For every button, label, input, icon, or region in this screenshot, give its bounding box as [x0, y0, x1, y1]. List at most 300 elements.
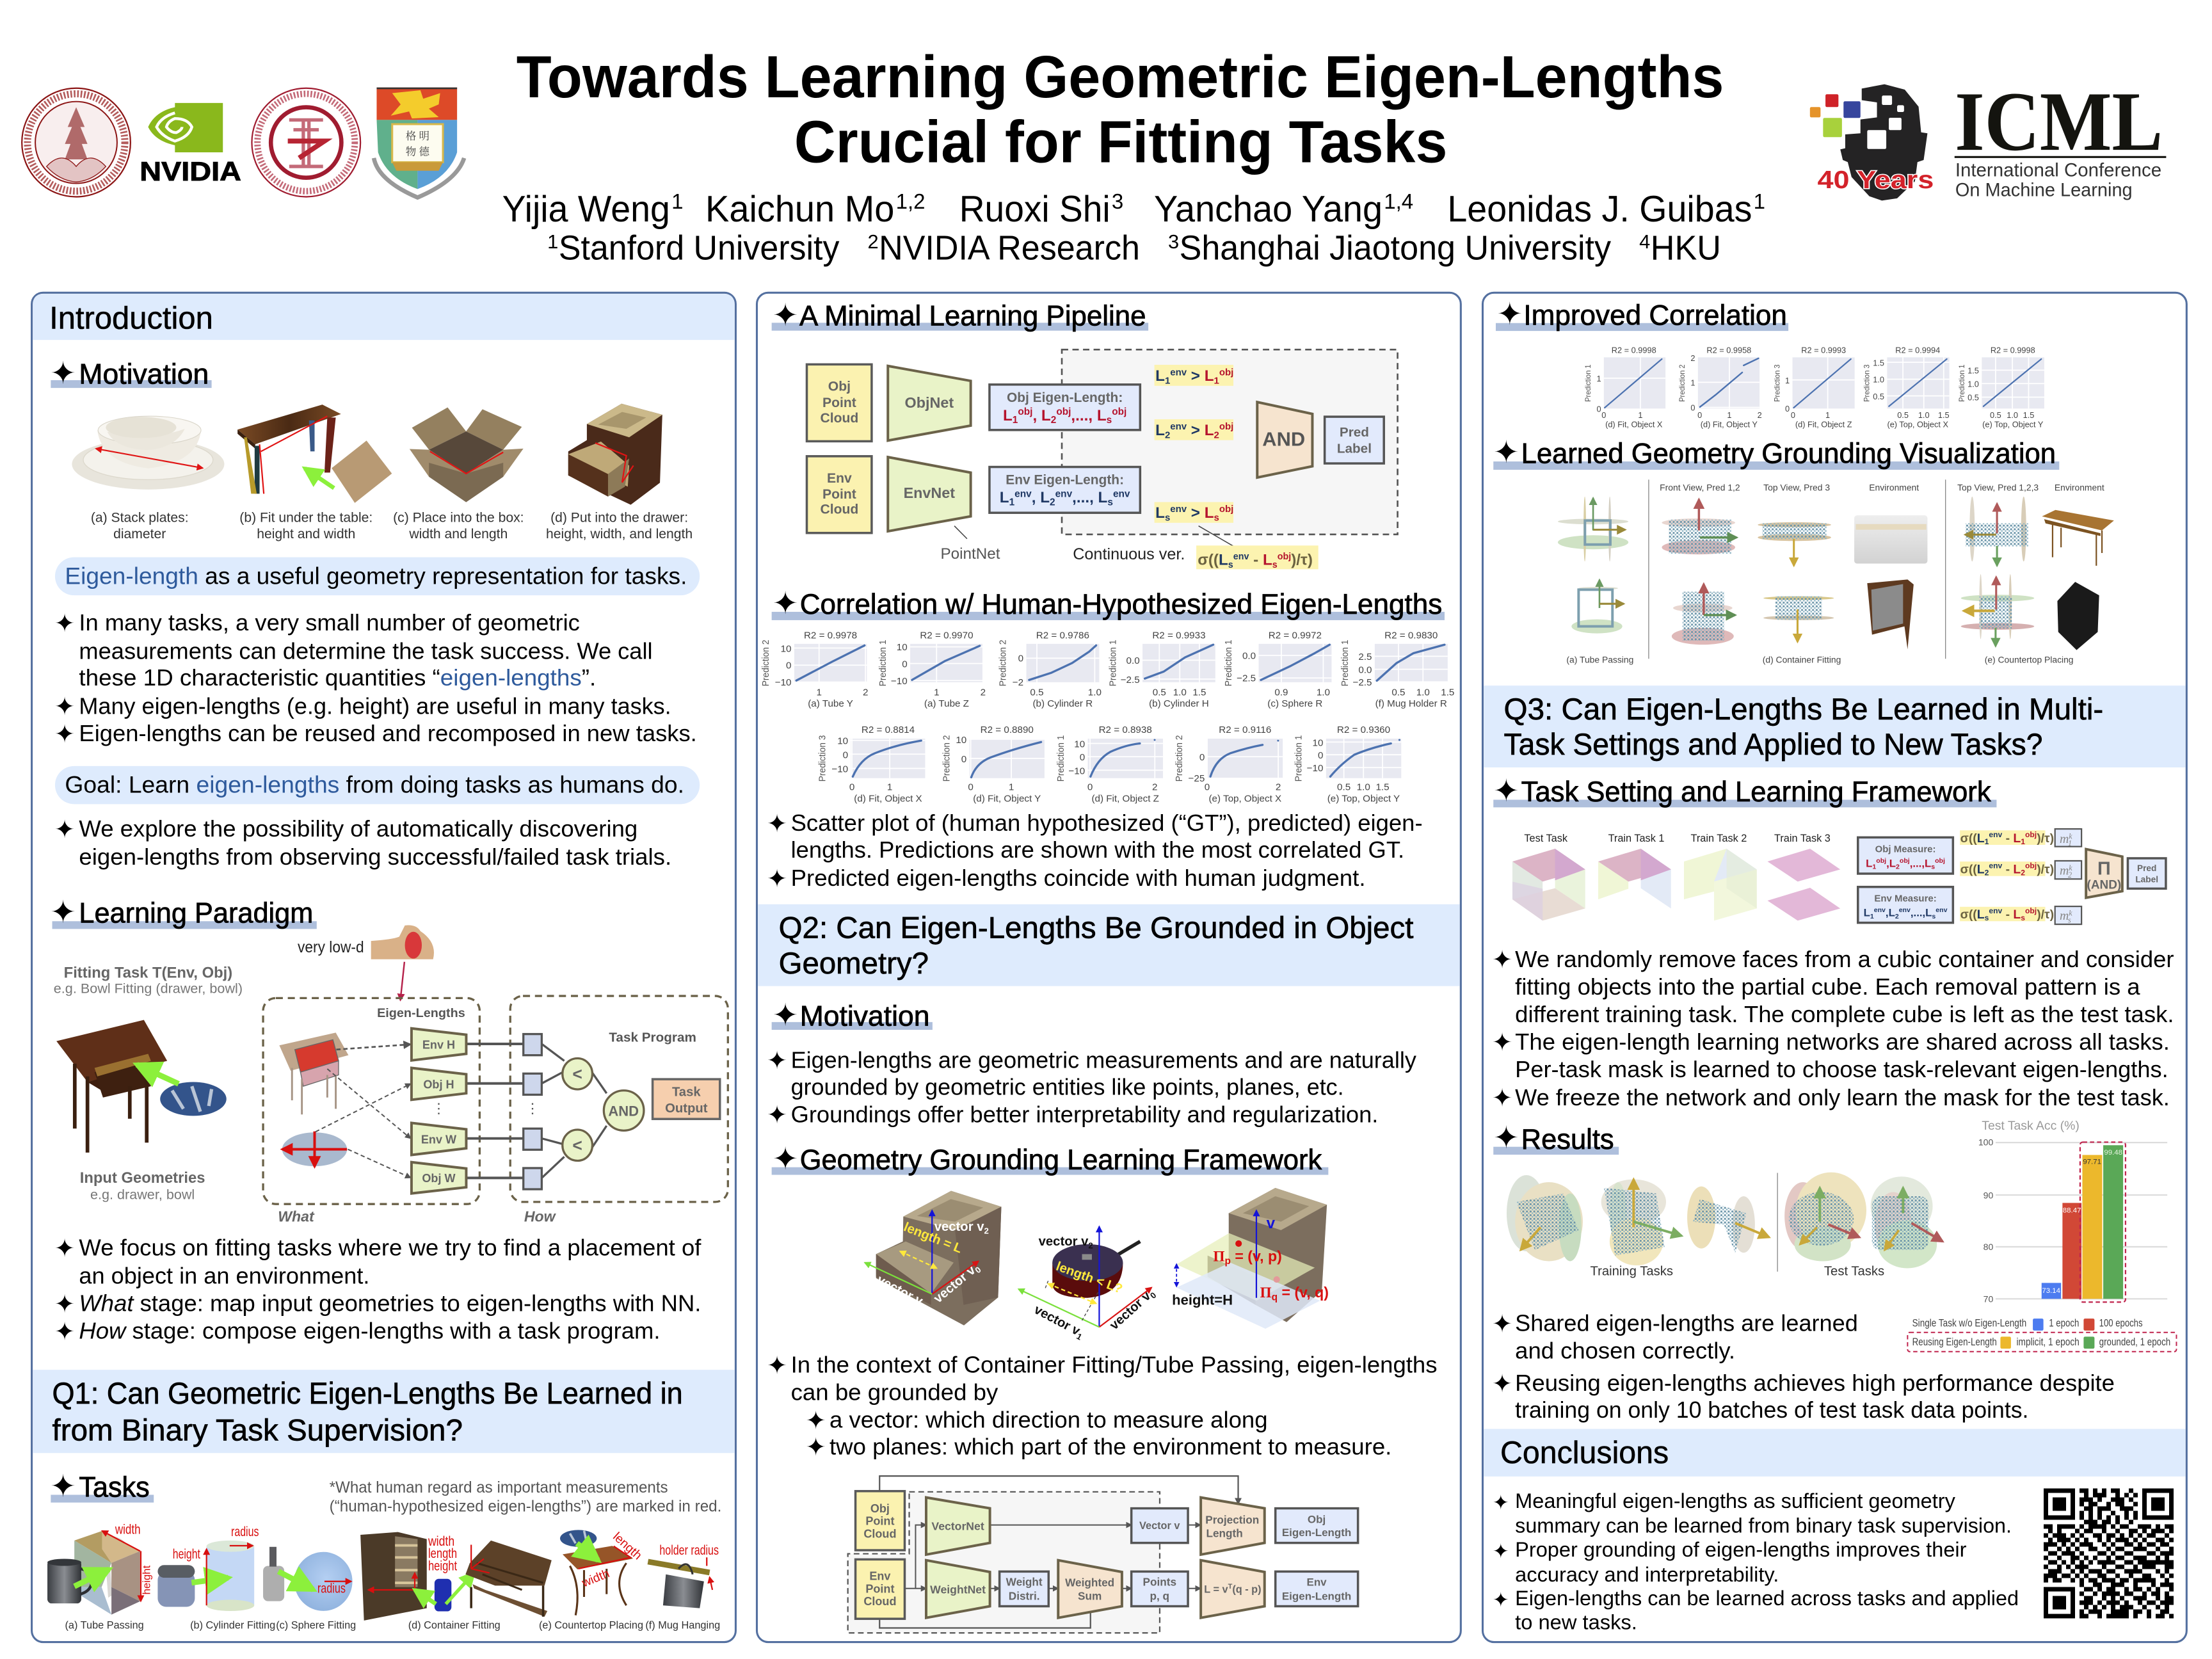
comparison: L2: L [1205, 422, 1214, 439]
box: env eigen-length: env [1014, 488, 1032, 499]
text: eigen-length bullets: measurements can determine the task success. We call [79, 637, 653, 664]
logo: HKU crest: 格 明 [406, 127, 429, 143]
image: drawer with planes: v [1267, 1215, 1276, 1232]
callout: goal: Goal: Learn eigen-lengths from doing tasks as humans do. [65, 771, 684, 798]
text: grounding bullets: can be grounded by [791, 1379, 998, 1406]
eigen-length encoder: Obj H: Obj H [423, 1078, 454, 1091]
diagram: learning paradigm: How [524, 1208, 557, 1225]
block: length formula: (q - p) [1232, 1583, 1262, 1595]
encoder: VectorNet: VectorNet [931, 1519, 984, 1532]
chart: Tube Z: 10 [897, 642, 908, 653]
chart: improved Fit Object X: R2 = 0.9998 [1612, 345, 1656, 355]
heading: Introduction: Introduction [49, 301, 213, 336]
encoder: ObjNet [888, 366, 971, 440]
subheading: Results [1493, 1120, 1619, 1156]
chart: improved Top Object Y: 0.5 [1990, 410, 2001, 420]
comparison: L2 [1155, 419, 1233, 440]
text: eigen-length bullets [54, 609, 697, 749]
chart: Mug Holder R: 1.0 [1416, 687, 1430, 698]
chart: Top Object Y: 1.0 [1357, 781, 1370, 792]
subheading: Results: Results [1521, 1124, 1614, 1155]
chart: improved Fit Object Y: 0 [1690, 403, 1695, 412]
box: vector v [1132, 1509, 1188, 1543]
box: pred label: Label [1337, 442, 1372, 456]
image: tube passing: height [141, 1565, 153, 1594]
visualization: tube passing [1558, 497, 1628, 634]
chart: improved Fit Object X: 1 [1638, 410, 1642, 420]
chart: Sphere R: 0.0 [1242, 650, 1256, 661]
visualization: countertop placing pred 1 2 3 [1961, 497, 2034, 646]
text: eigen-length bullets: ✦ [54, 693, 75, 721]
subheading: Motivation: ✦ [50, 356, 76, 392]
text: task setting bullets: Per-task mask is learned to choose task-relevant eigen-lengths. [1515, 1056, 2168, 1082]
comparison: Ls [1155, 502, 1233, 523]
box: env eigen-length: L [1000, 489, 1009, 506]
chart: Tube Y: (a) Tube Y [808, 698, 853, 709]
image: stack plates [72, 416, 224, 490]
chart: Top Object X: R2 = 0.9116 [1219, 725, 1271, 735]
box: obj eigen-length: Eigen-Length [1282, 1527, 1351, 1539]
caption: stack plates: diameter [113, 527, 166, 541]
formula: mask 1: 1 [1985, 837, 1989, 846]
comparison: L2: L [1155, 422, 1165, 439]
image: sphere fitting [263, 1547, 353, 1611]
caption: drawer: (d) Put into the drawer: [550, 511, 688, 525]
chart: improved Fit Object Z: (d) Fit, Object Z [1795, 419, 1852, 429]
chart: improved Top Object Y: 1.5 [2023, 410, 2034, 420]
formula: continuous version: env [1233, 552, 1249, 562]
logic: AND [1257, 402, 1312, 477]
image: drawer with planes [1172, 1188, 1329, 1329]
chart: Fit Object Y [942, 725, 1045, 805]
comparison: Ls: obj [1219, 504, 1233, 515]
diagram: learning paradigm: What [278, 1208, 315, 1225]
chart: improved Top Object X: 1.5 [1938, 410, 1950, 420]
comparison: L1: 1 [1165, 376, 1170, 387]
block: length formula [1201, 1560, 1265, 1618]
labels: training and test tasks: Test Tasks [1824, 1264, 1884, 1278]
formula: mask s: k [2069, 908, 2072, 917]
caption: box: width and length [408, 527, 508, 541]
caption: drawer [546, 511, 693, 541]
image: drawer with vectors: vector v [931, 1263, 978, 1306]
image: cooker with vectors: vector v [1032, 1302, 1082, 1338]
box: env point cloud: Cloud [863, 1595, 896, 1608]
logo: ICML 40 years [1810, 74, 2166, 201]
formula: mask 2: σ((L [1960, 862, 1985, 876]
authors: Ruoxi Shi [959, 189, 1110, 230]
legend: accuracy chart [1907, 1318, 2176, 1352]
caption: table [239, 511, 373, 541]
visualization: container fitting pred 1 2 [1662, 499, 1736, 645]
formula: mask s: obj [2025, 906, 2037, 915]
formula: mask s: s [2021, 913, 2025, 922]
labels: grounding views: (d) Container Fitting [1763, 654, 1841, 664]
image: drawer with planes: Π [1214, 1248, 1225, 1265]
eigen-length encoder: Obj H [412, 1068, 466, 1100]
image: drawer with planes: = (v, q) [1278, 1284, 1329, 1301]
chart: Top Object X [1174, 725, 1283, 805]
authors: 1,2 [896, 190, 926, 214]
subheading: Motivation: Motivation [79, 359, 209, 390]
text: conclusions bullets [1493, 1489, 2019, 1634]
chart: Fit Object Z: 0 [1080, 752, 1085, 763]
box: env point cloud: Point [865, 1582, 894, 1595]
chart: improved Top Object X: 0.5 [1897, 410, 1909, 420]
text: eigen-length bullets: In many tasks, a very small number of geometric [79, 609, 580, 636]
box: obj eigen-length: s [1107, 415, 1112, 426]
caption: stack plates: (a) Stack plates: [91, 511, 189, 525]
chart: Tube Z: R2 = 0.9970 [920, 630, 974, 641]
chart: improved Fit Object Z: 0 [1785, 404, 1790, 413]
text: grounding bullets: ✦ [767, 1351, 787, 1380]
chart: Tube Y: 1 [816, 687, 822, 698]
labels: grounding views: Top View, Pred 3 [1763, 483, 1830, 493]
encoder: ObjNet: ObjNet [905, 394, 954, 411]
chart: Tube Y: R2 = 0.9978 [804, 630, 857, 641]
box: env measure: Env Measure: [1874, 893, 1937, 904]
formula: continuous version: L [1263, 552, 1272, 569]
box: obj measure: obj [1935, 857, 1945, 865]
text: focus bullets: What stage: map input geometries to eigen-lengths with NN. [79, 1290, 701, 1317]
chart: Cylinder R: Prediction 2 [998, 640, 1009, 686]
comparison: Ls: L [1205, 504, 1214, 522]
box: env eigen-length: Env Eigen-Length: [1006, 473, 1124, 488]
box: env eigen-length: env [1113, 488, 1130, 499]
box: env measure: ,...,L [1911, 907, 1932, 919]
icon: test task cube [1512, 849, 1585, 920]
subheading: Motivation [772, 997, 933, 1033]
text: conclusions bullets: Proper grounding of eigen-lengths improves their [1515, 1537, 1967, 1561]
box: env measure: 2 [1895, 913, 1899, 920]
chart: improved Fit Object Z: 1 [1825, 410, 1830, 420]
chart: Top Object Y: −10 [1307, 763, 1323, 774]
image: faded table with red drawer [279, 1032, 348, 1114]
chart: improved Fit Object Y: R2 = 0.9958 [1706, 345, 1751, 355]
chart: Mug Holder R [1340, 630, 1454, 709]
comparator: less than bottom: < [572, 1136, 582, 1155]
image: drawer with vectors: length = L [902, 1220, 964, 1256]
affiliations: 4 [1639, 230, 1650, 253]
box: env point cloud: Env [869, 1570, 890, 1583]
eigen-length encoder: Obj W [412, 1162, 466, 1194]
formula: mask 1: k [2069, 831, 2072, 840]
box: env measure: ,L [1886, 907, 1895, 919]
formula: continuous version: - [1249, 552, 1263, 569]
text: grounding motivation bullets: Eigen-lengths are geometric measurements and are naturally [791, 1046, 1417, 1073]
chart: test task accuracy: Test Task Acc (%) [1982, 1119, 2080, 1133]
text: focus bullets: ✦ [54, 1317, 75, 1346]
labels: tasks: Train Task 1 [1608, 833, 1664, 844]
image: countertop placing [560, 1530, 645, 1615]
diagram: minimal learning pipeline [807, 349, 1398, 570]
chart: improved Fit Object Y: 2 [1758, 410, 1762, 420]
eigen-length encoder: Env W: Env W [421, 1133, 457, 1146]
diagram: learning paradigm: Task Program [609, 1030, 696, 1045]
box: env point cloud: Env [827, 471, 852, 486]
chart: Tube Y: 10 [781, 643, 791, 654]
block: weighted sum: Sum [1078, 1589, 1102, 1602]
text: task setting bullets: ✦ [1492, 1084, 1512, 1113]
chart: improved Fit Object X: Prediction 1 [1583, 364, 1592, 402]
chart: improved Fit Object Z: 1 [1785, 376, 1790, 385]
chart: test task accuracy [1978, 1119, 2167, 1304]
formula: mask s: s [1985, 913, 1989, 922]
text: results bullets: Shared eigen-lengths are learned [1515, 1310, 1858, 1336]
labels: tasks: Train Task 2 [1691, 833, 1747, 844]
formula: mask 1: - [2002, 831, 2013, 846]
box: env eigen-length: , L [1032, 489, 1050, 506]
box: obj measure: 2 [1896, 863, 1900, 871]
heading: Q3 [1484, 685, 2186, 767]
image: drawer with vectors: vector v [874, 1273, 925, 1308]
formula: mask 1: 1 [2068, 838, 2072, 847]
chart: improved Top Object Y: 0.5 [1968, 393, 1979, 403]
box: env measure: env [1874, 906, 1886, 914]
formula: mask 2: 2 [1985, 869, 1989, 878]
box: obj point cloud: Cloud [863, 1527, 896, 1540]
logo: NVIDIA: NVIDIA [140, 156, 241, 186]
subheading: Geometry Grounding: Geometry Grounding Learning Framework [800, 1144, 1322, 1176]
image: cooker with vectors: 0 [1148, 1290, 1158, 1301]
text: grounding bullets [767, 1351, 1438, 1462]
box: task output: Output [665, 1102, 708, 1116]
box: env point cloud [856, 1559, 904, 1619]
captions: task names [65, 1620, 720, 1631]
diagram: grounding framework [848, 1476, 1358, 1633]
chart: Cylinder H: (b) Cylinder H [1149, 698, 1209, 709]
logo: Stanford seal [22, 88, 131, 196]
subheading: Learning Paradigm: Learning Paradigm [79, 897, 313, 929]
diagram: learning paradigm: Eigen-Lengths [377, 1006, 465, 1020]
chart: Top Object Y: 0 [1318, 750, 1323, 761]
formula: mask 1 [1960, 829, 2081, 847]
comparator: less than bottom [563, 1130, 592, 1161]
chart: Cylinder H: 1.0 [1173, 687, 1187, 698]
chart: Fit Object X [817, 725, 925, 805]
legend: accuracy chart: 100 epochs [2099, 1318, 2143, 1329]
image: cooker with vectors [1018, 1226, 1158, 1342]
chart: Cylinder R: 0 [1018, 653, 1023, 664]
text: task setting bullets: We freeze the network and only learn the mask for the test task. [1515, 1084, 2170, 1110]
comparison: Ls: env [1170, 504, 1187, 515]
chart: Top Object Y: 0.5 [1337, 781, 1350, 792]
box: obj measure: L [1866, 857, 1872, 869]
chart: Sphere R: 1.0 [1317, 687, 1330, 698]
chart: Fit Object Z: (d) Fit, Object Z [1091, 794, 1159, 805]
box: obj eigen-length: L [1003, 407, 1013, 424]
chart: Top Object X: 2 [1276, 781, 1281, 792]
box: obj eigen-length: obj [1056, 406, 1071, 417]
text: grounding motivation bullets: grounded by geometric entities like points, planes, etc. [791, 1073, 1344, 1100]
box: obj eigen-length: Obj Eigen-Length: [1007, 390, 1123, 405]
box: obj point cloud: Cloud [820, 411, 858, 426]
chart: Tube Y: 2 [863, 687, 868, 698]
chart: Tube Z: 1 [934, 687, 940, 698]
subheading: Learning Paradigm: ✦ [50, 894, 76, 930]
text: focus bullets: ✦ [54, 1234, 75, 1263]
chart: Cylinder R: −2 [1013, 677, 1023, 688]
box: env measure: env [1899, 906, 1911, 914]
affiliations: HKU [1651, 229, 1721, 268]
encoder: VectorNet [926, 1498, 990, 1555]
labels: grounding views: Front View, Pred 1,2 [1660, 483, 1740, 493]
chart: Cylinder R [998, 630, 1102, 709]
labels: grounding views: Environment [2055, 483, 2104, 493]
chart: Mug Holder R: (f) Mug Holder R [1375, 698, 1447, 709]
logo: HKU crest [374, 88, 464, 198]
chart: Sphere R: Prediction 1 [1224, 640, 1234, 686]
chart: Cylinder H: 1.5 [1192, 687, 1206, 698]
comparison: L1 [1155, 365, 1233, 387]
box: points p q: Points [1142, 1575, 1176, 1588]
block: length formula: L = v [1204, 1583, 1228, 1595]
chart: Fit Object X: (d) Fit, Object X [854, 794, 922, 805]
box: obj eigen-length: obj [1112, 406, 1126, 417]
comparison: L1: env [1170, 367, 1187, 378]
chart: Tube Z: (a) Tube Z [924, 698, 969, 709]
box: env eigen-length [1276, 1571, 1358, 1607]
text: scatter plot bullets: ✦ [767, 810, 787, 838]
chart: improved Fit Object Y: 1 [1727, 410, 1732, 420]
box: env measure: 1 [1870, 913, 1874, 920]
caption: table: height and width [257, 527, 355, 541]
heading: Introduction [33, 294, 735, 340]
panel: middle column [757, 293, 1461, 1642]
formula: mask s: )/τ)× [2037, 908, 2061, 922]
chart: Mug Holder R: R2 = 0.9830 [1384, 630, 1438, 641]
chart: test task accuracy: 97.71 [2083, 1158, 2101, 1166]
text: explore bullet: eigen-lengths from observing successful/failed task trials. [79, 844, 671, 870]
encoder: WeightNet [926, 1560, 990, 1618]
logo: HKU crest: 物 德 [406, 143, 430, 158]
image: open drawer cabinet [568, 404, 662, 505]
box: obj measure [1858, 837, 1953, 874]
icon: train task 1 [1598, 849, 1671, 908]
chart: Fit Object X: −10 [831, 764, 848, 775]
chart: Fit Object X: 10 [837, 736, 848, 747]
image: drawer with vectors [865, 1191, 1001, 1326]
box: weight distribution [1000, 1571, 1048, 1607]
text: eigen-length bullets: Eigen-lengths can be reused and recomposed in new tasks. [79, 720, 697, 746]
chart: improved Fit Object X: (d) Fit, Object X [1605, 419, 1663, 429]
chart: Cylinder H: Prediction 1 [1108, 640, 1118, 686]
block: weighted sum: Weighted [1065, 1576, 1114, 1589]
text: eigen-length bullets: ✦ [54, 609, 75, 638]
diagram: learning paradigm: Input Geometries [80, 1169, 205, 1187]
formula: mask 1: 1 [2021, 837, 2025, 846]
formula: continuous version: s [1228, 560, 1233, 570]
visualization: test tasks [1784, 1173, 1943, 1268]
box: pred label: Pred [1340, 425, 1369, 440]
formula: mask 2: k [2069, 863, 2072, 872]
heading: Q2: Geometry? [779, 947, 929, 981]
chart: improved Fit Object Y: (d) Fit, Object Y [1701, 419, 1758, 429]
subheading: Learned Geometry Grounding Visualization: Learned Geometry Grounding Visualization [1521, 438, 2056, 470]
comparison: L1: L [1205, 367, 1214, 385]
formula: mask 1: obj [2025, 830, 2037, 839]
note: human hypothesized [330, 1479, 721, 1516]
labels: training and test tasks [1590, 1264, 1884, 1278]
chart: Fit Object Z: 2 [1152, 781, 1157, 792]
text: grounding motivation bullets: ✦ [767, 1101, 787, 1130]
chart: Top Object Y: R2 = 0.9360 [1337, 725, 1390, 735]
subheading: Improved Correlation: ✦ [1497, 296, 1523, 332]
text: grounding bullets: two planes: which part of the environment to measure. [830, 1433, 1391, 1459]
logo: ICML 40 years: International Conference [1955, 160, 2161, 181]
box: pred label: Pred [2137, 863, 2156, 873]
chart: improved Top Object Y: Prediction 1 [1957, 364, 1966, 402]
chart: improved Fit Object Y: 1 [1690, 378, 1695, 388]
authors: Leonidas J. Guibas [1447, 189, 1752, 230]
subheading: A Minimal Learning Pipeline: A Minimal Learning Pipeline [799, 300, 1146, 332]
chart: improved Top Object X: 1.5 [1873, 358, 1884, 367]
affiliations [547, 229, 1721, 268]
box: obj point cloud [856, 1491, 904, 1550]
box: obj point cloud: Point [865, 1515, 894, 1528]
comparator: less than top [563, 1059, 592, 1089]
formula: mask 1: L [2013, 831, 2021, 846]
chart: Tube Y: Prediction 2 [761, 640, 771, 686]
labels: tasks [1524, 833, 1831, 844]
formula: mask 2: env [1989, 862, 2002, 870]
chart: test task accuracy: 99.48 [2104, 1149, 2122, 1157]
chart: Top Object Y [1294, 725, 1401, 805]
text: focus bullets [54, 1234, 701, 1346]
chart: improved Top Object Y: 1.0 [2007, 410, 2018, 420]
formula: mask 1: )/τ)× [2037, 831, 2061, 846]
formula: mask 2: 2 [2068, 870, 2072, 879]
formula: continuous version: s [1272, 560, 1278, 570]
subheading: Geometry Grounding: ✦ [773, 1141, 798, 1177]
image: container fitting: length [428, 1546, 457, 1561]
comparison: Ls: s [1165, 512, 1170, 523]
box: env measure: s [1932, 913, 1936, 920]
chart: improved Top Object X: R2 = 0.9994 [1895, 345, 1940, 355]
chart: Tube Z: 0 [902, 659, 908, 670]
text: results bullets: training on only 10 batches of test task data points. [1515, 1397, 2028, 1423]
diagram: minimal learning pipeline: Continuous ver. [1073, 545, 1185, 563]
heading: Q1: from Binary Task Supervision? [52, 1413, 463, 1447]
chart: improved Top Object X: 1.0 [1918, 410, 1930, 420]
labels: grounding views: (a) Tube Passing [1566, 654, 1633, 664]
text: eigen-length bullets: ✦ [54, 720, 75, 749]
image: countertop placing: length [610, 1530, 645, 1562]
authors [502, 189, 1765, 230]
image: cylinder fitting: height [173, 1547, 200, 1562]
formula: mask 1: σ((L [1960, 831, 1985, 846]
box: obj eigen-length [1276, 1509, 1358, 1543]
callout: eigen-length definition: Eigen-length as a useful geometry representation for tasks. [65, 562, 687, 589]
chart: Fit Object Y: 1 [1009, 781, 1014, 792]
labels: grounding views [1566, 483, 2104, 664]
chart: Fit Object Y: R2 = 0.8890 [981, 725, 1034, 735]
block: projection length: Projection [1205, 1513, 1259, 1526]
box: obj measure: s [1931, 863, 1935, 871]
image: drawer with planes: height=H [1172, 1292, 1233, 1308]
authors: Kaichun Mo [705, 189, 894, 230]
image: container fitting: height [428, 1559, 457, 1573]
chart: Tube Z [878, 630, 986, 709]
text: grounding bullets: ✦ [806, 1433, 826, 1462]
subheading: Task Setting: ✦ [1493, 773, 1519, 809]
text: task setting bullets: ✦ [1492, 1029, 1512, 1057]
box: obj measure: ,...,L [1910, 857, 1931, 869]
chart: Tube Z: 2 [981, 687, 986, 698]
text: eigen-length bullets: these 1D characteristic quantities “ eigen-lengths”. [79, 664, 596, 691]
text: focus bullets: ✦ [54, 1290, 75, 1318]
text: scatter plot bullets: Scatter plot of (human hypothesized (“GT”), predicted) eigen- [791, 810, 1423, 836]
